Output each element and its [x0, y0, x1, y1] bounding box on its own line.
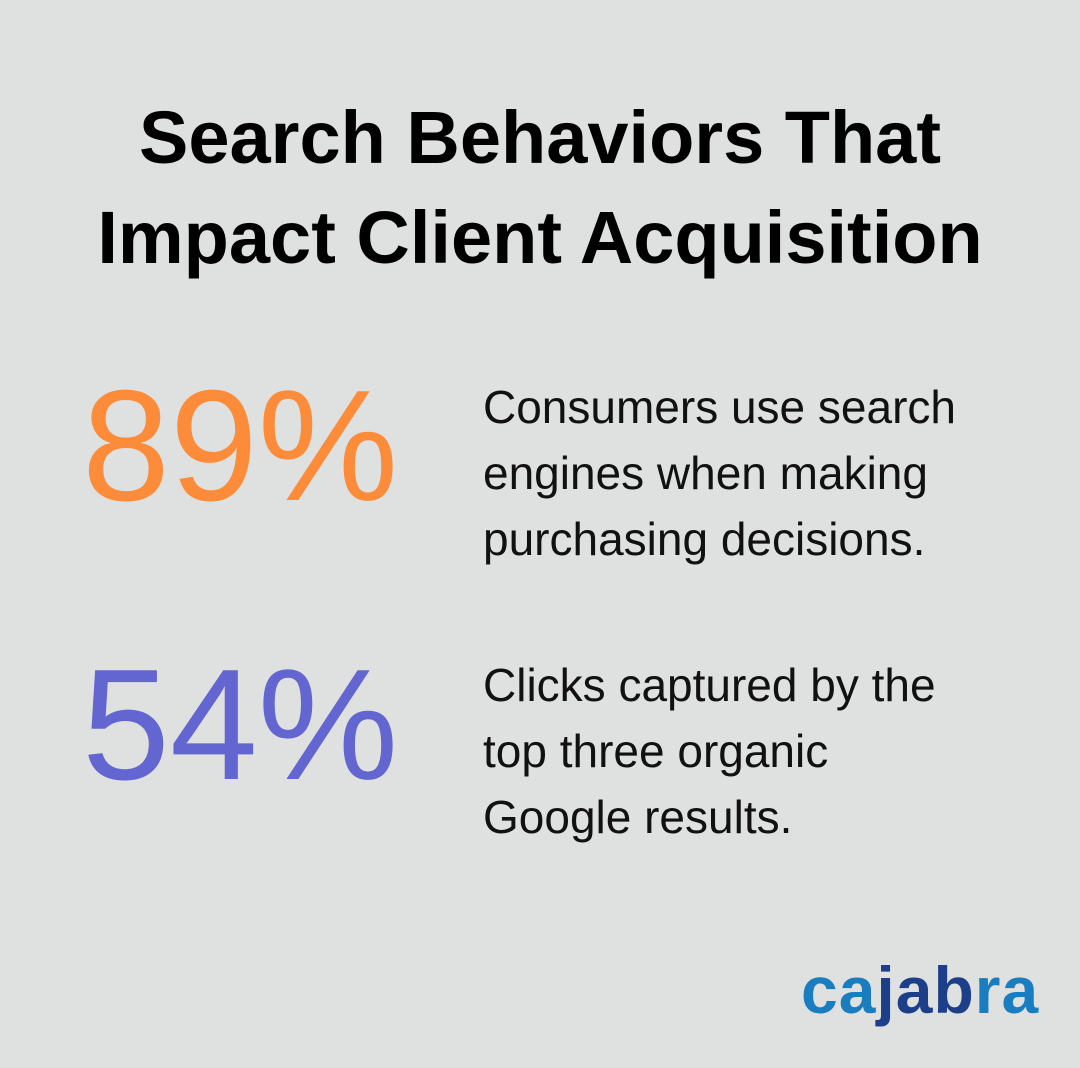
stat: 54%: 54% [82, 637, 398, 813]
stat: 89%: 89% [82, 358, 398, 534]
description: 54%: Google results. [483, 791, 792, 843]
title: Search Behaviors That [139, 96, 941, 179]
description: 89%: engines when making [483, 447, 928, 499]
logo: cajabra [801, 953, 1039, 1027]
description: 89%: Consumers use search [483, 381, 956, 433]
description: 54%: Clicks captured by the [483, 659, 936, 711]
description: 89% [483, 381, 956, 565]
description: 54% [483, 659, 936, 843]
description: 89%: purchasing decisions. [483, 513, 925, 565]
title [97, 96, 983, 279]
title: Impact Client Acquisition [97, 196, 983, 279]
description: 54%: top three organic [483, 725, 828, 777]
